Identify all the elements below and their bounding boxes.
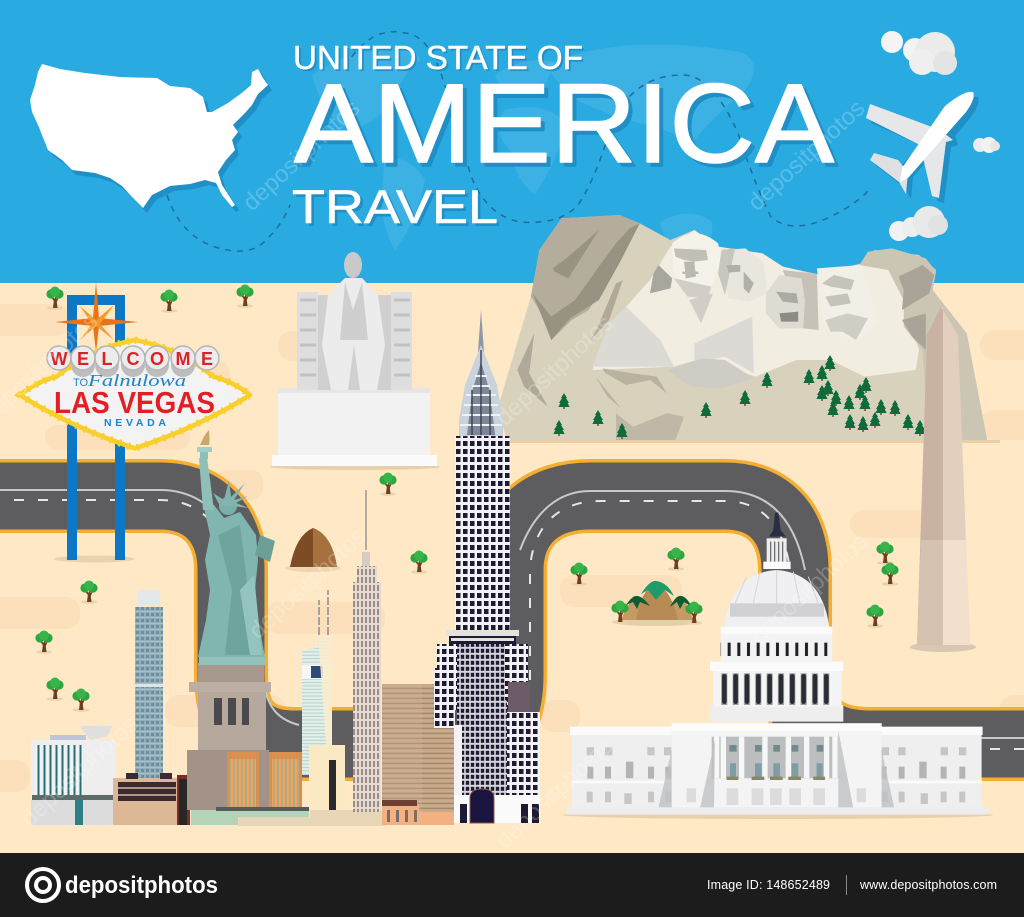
lantern [767, 538, 787, 563]
plane fuselage [900, 92, 974, 182]
white base [454, 795, 540, 823]
left grey rock [531, 215, 640, 340]
plane tail [870, 153, 908, 194]
sign board [20, 340, 250, 448]
Empire State Building [353, 490, 381, 812]
grey slope center [694, 317, 754, 373]
pedestal [278, 392, 430, 455]
title: United State of: UNITED STATE OF [295, 41, 585, 78]
Mount Rushmore [497, 215, 1000, 443]
pale glass tower [302, 590, 385, 826]
watermarks: depositphotos [491, 310, 618, 431]
head and crown [213, 480, 249, 515]
Chrysler Building [434, 310, 540, 823]
to fabulous: TO [73, 377, 89, 389]
plane wings [866, 104, 953, 198]
trees [35, 284, 899, 712]
green mounds [612, 581, 700, 626]
pine trees [553, 355, 926, 439]
Roosevelt [766, 270, 819, 330]
title: Travel: TRAVEL [292, 180, 498, 233]
image id: Image ID: 148652489 [707, 878, 830, 892]
raised arm [199, 457, 214, 510]
world map watermark [312, 44, 754, 255]
Washington [650, 233, 722, 323]
tablet [255, 535, 275, 562]
welcome letters: L [102, 349, 112, 369]
welcome letters: E [77, 349, 89, 369]
title: America: AMERICA [294, 61, 834, 186]
depositphotos logo icon [27, 869, 59, 901]
blue posts [67, 295, 125, 560]
cloud small right [973, 137, 1000, 153]
depositphotos logo text: depositphotos [65, 872, 218, 899]
shaft [455, 436, 510, 631]
setbacks [437, 644, 528, 710]
lower drum [710, 662, 843, 722]
welcome letters: O [150, 349, 164, 369]
title: United State of: UNITED STATE OF [293, 39, 583, 76]
center block [658, 723, 894, 808]
Lincoln Memorial [270, 252, 440, 470]
Las Vegas sign [20, 282, 250, 562]
to fabulous [73, 371, 186, 390]
robe [198, 503, 265, 657]
welcome letters: W [50, 349, 68, 369]
white carved area [592, 230, 919, 377]
footer bar [0, 853, 1024, 917]
ground shadow bands [0, 304, 1024, 792]
icon: airplane [866, 92, 979, 203]
entrance [470, 789, 494, 823]
watermarks: depositphotos [244, 523, 371, 644]
right rock [859, 248, 987, 440]
USA map silhouette shadow [34, 69, 272, 213]
dome [723, 570, 830, 634]
watermarks: depositphotos [238, 95, 365, 216]
upper drum [721, 634, 832, 662]
watermarks: depositphotos [743, 95, 870, 216]
watermarks: depositphotos [491, 733, 618, 854]
tall blue glass tower [135, 590, 163, 792]
cloud lower [889, 206, 948, 241]
dashed flight route [167, 32, 869, 251]
dark folds [533, 223, 640, 340]
crown [459, 345, 503, 437]
Jefferson [718, 248, 768, 302]
welcome letters: M [176, 349, 190, 369]
Statue of Liberty [187, 430, 275, 810]
cloud top [881, 31, 957, 75]
cast shadows [658, 730, 894, 808]
tan hotel building [113, 773, 190, 825]
lower tower [434, 668, 455, 728]
Lincoln [817, 265, 878, 342]
rock base [497, 215, 987, 440]
torch [197, 430, 212, 459]
watermarks [0, 95, 873, 854]
white office building [31, 726, 115, 825]
to fabulous: Falnulowa [87, 371, 186, 390]
sand ground [0, 283, 1024, 853]
star [55, 282, 138, 352]
sky background [0, 0, 1024, 283]
las vegas: LAS VEGAS [54, 385, 215, 420]
brown office building [382, 684, 454, 825]
watermarks: depositphotos [746, 528, 873, 649]
welcome bulbs [47, 346, 219, 377]
seated figure [322, 278, 385, 390]
Capitol Building [563, 513, 993, 819]
nevada: NEVADA [104, 417, 166, 429]
gargoyle band [446, 630, 519, 636]
green terrace [191, 807, 310, 826]
welcome letters [50, 349, 213, 369]
footer website: www.depositphotos.com [859, 878, 997, 892]
orange twin buildings [227, 752, 302, 808]
welcome letters: E [201, 349, 213, 369]
statue of freedom [769, 513, 786, 537]
chair [297, 292, 412, 390]
lower rock shadows [616, 413, 684, 440]
title: Travel: TRAVEL [295, 183, 501, 236]
grey slope left [592, 307, 674, 367]
brown hill [285, 528, 341, 572]
side wings [570, 727, 983, 808]
Washington Monument [910, 307, 976, 652]
road [0, 490, 1024, 749]
USA map silhouette [30, 64, 268, 208]
watermarks: depositphotos [16, 711, 143, 832]
title: America: AMERICA [298, 65, 838, 190]
spire [478, 310, 484, 352]
pedestal [187, 655, 271, 810]
welcome letters: C [126, 349, 140, 369]
